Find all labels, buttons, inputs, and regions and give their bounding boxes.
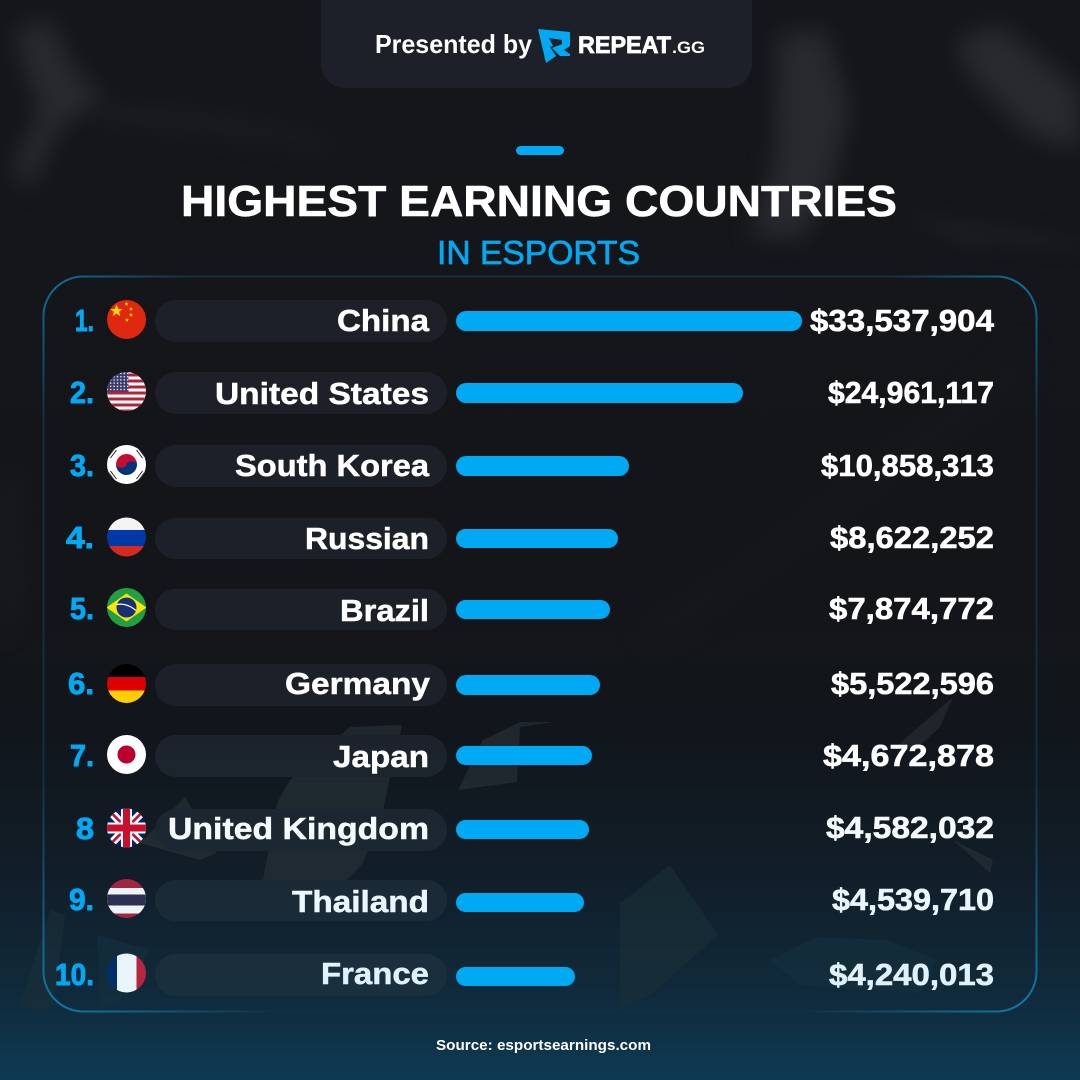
source note: Source: esportsearnings.com bbox=[436, 1038, 651, 1054]
name pill bbox=[155, 300, 447, 342]
country name: Brazil bbox=[340, 593, 429, 628]
icon: UK flag bbox=[106, 808, 146, 848]
row 2: United States bbox=[70, 372, 994, 414]
name pill bbox=[155, 735, 447, 777]
icon: Thailand flag bbox=[106, 878, 146, 918]
rank: 8 bbox=[76, 811, 94, 846]
amount: $24,961,117 bbox=[828, 375, 994, 410]
presented by text: Presented by bbox=[375, 29, 533, 59]
title: HIGHEST EARNING COUNTRIES bbox=[181, 177, 897, 226]
row 10: France bbox=[55, 953, 994, 996]
header tab bbox=[321, 0, 752, 88]
name pill bbox=[155, 589, 447, 630]
country name: China bbox=[337, 303, 430, 338]
row 6: Germany bbox=[68, 664, 994, 706]
earnings bar bbox=[456, 675, 600, 695]
icon: France flag bbox=[106, 953, 146, 993]
name pill bbox=[155, 809, 447, 851]
rank: 6. bbox=[68, 666, 94, 701]
icon: Brazil flag bbox=[106, 588, 146, 628]
earnings bar bbox=[456, 746, 592, 765]
name pill bbox=[155, 445, 447, 487]
subtitle: IN ESPORTS bbox=[437, 234, 640, 271]
row 3: South Korea bbox=[70, 444, 994, 487]
rank: 2. bbox=[70, 375, 94, 410]
country name: Germany bbox=[285, 666, 431, 701]
accent bar bbox=[516, 146, 564, 155]
rank: 4. bbox=[66, 520, 94, 555]
row 5: Brazil bbox=[70, 588, 994, 630]
amount: $5,522,596 bbox=[831, 666, 994, 701]
country name: South Korea bbox=[235, 448, 430, 483]
country name: France bbox=[321, 956, 429, 991]
name pill bbox=[155, 880, 447, 921]
row 7: Japan bbox=[70, 734, 994, 777]
amount: $33,537,904 bbox=[810, 303, 995, 338]
earnings bar bbox=[456, 820, 589, 839]
country name: Japan bbox=[333, 739, 429, 774]
row 1: China bbox=[75, 300, 995, 342]
country name: Thailand bbox=[292, 884, 429, 919]
country name: Russian bbox=[305, 521, 429, 556]
earnings bar bbox=[456, 600, 610, 619]
earnings bar bbox=[456, 383, 743, 403]
logo wordmark: .GG bbox=[672, 38, 705, 57]
earnings bar bbox=[456, 529, 618, 548]
name pill bbox=[155, 518, 447, 559]
country name: United Kingdom bbox=[168, 811, 429, 846]
name pill bbox=[155, 664, 447, 706]
name pill bbox=[155, 372, 447, 414]
row 4: Russian bbox=[66, 517, 994, 559]
icon: Germany flag bbox=[106, 664, 146, 704]
rank: 9. bbox=[69, 882, 94, 917]
rank: 10. bbox=[55, 957, 94, 992]
logo wordmark: REPEAT bbox=[578, 32, 671, 59]
amount: $8,622,252 bbox=[830, 520, 994, 555]
icon: South Korea flag bbox=[106, 444, 146, 484]
icon: Japan flag bbox=[106, 734, 146, 774]
country name: United States bbox=[215, 376, 429, 411]
icon: repeat logo bbox=[538, 29, 570, 63]
row 8: United Kingdom bbox=[76, 808, 994, 851]
earnings bar bbox=[456, 893, 584, 912]
rank: 7. bbox=[70, 738, 94, 773]
earnings bar bbox=[456, 967, 575, 986]
amount: $4,582,032 bbox=[826, 810, 994, 845]
amount: $4,240,013 bbox=[829, 957, 994, 992]
icon: Russia flag bbox=[106, 517, 146, 558]
earnings bar bbox=[456, 456, 629, 476]
earnings bar bbox=[456, 311, 802, 331]
amount: $10,858,313 bbox=[821, 448, 994, 483]
icon: China flag bbox=[106, 300, 146, 340]
amount: $7,874,772 bbox=[829, 591, 994, 626]
amount: $4,539,710 bbox=[832, 882, 994, 917]
row 9: Thailand bbox=[69, 878, 994, 921]
panel: ranking frame bbox=[44, 276, 1036, 1012]
rank: 1. bbox=[75, 303, 94, 338]
amount: $4,672,878 bbox=[823, 738, 994, 773]
rank: 3. bbox=[70, 448, 94, 483]
dollar notes bbox=[20, 697, 993, 1010]
icon: US flag bbox=[106, 372, 146, 412]
name pill bbox=[155, 954, 447, 996]
rank: 5. bbox=[70, 591, 94, 626]
